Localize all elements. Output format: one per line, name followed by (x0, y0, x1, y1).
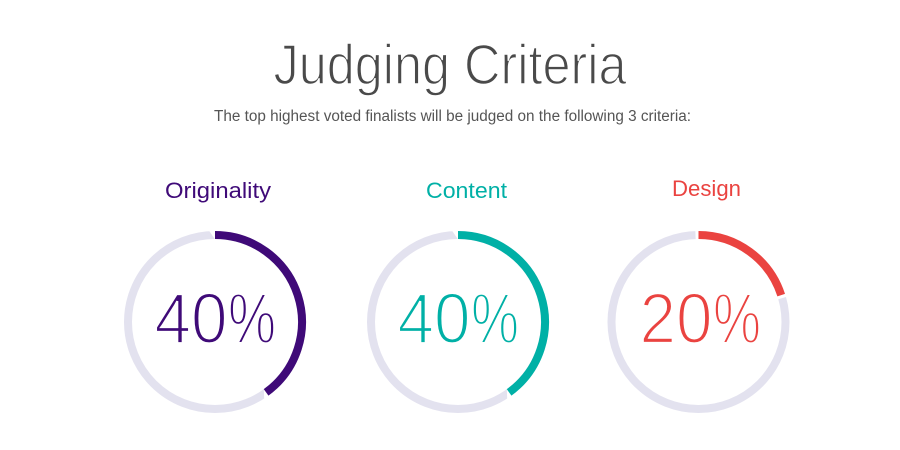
heading: content: Content (426, 178, 507, 203)
heading: originality: Originality (165, 178, 271, 203)
value: originality: 40 (154, 280, 228, 359)
ring gap: content (455, 220, 591, 394)
ring value arc: design 20% (698, 235, 781, 295)
panel: design (612, 176, 786, 409)
ring gap: design (696, 235, 782, 298)
heading: design: Design (672, 176, 741, 201)
value: content: 40 (398, 280, 470, 359)
ring track: originality (128, 235, 302, 409)
ring track: design (612, 235, 786, 409)
subtitle: The top highest voted finalists will be judged on the following 3 criteria: (214, 108, 691, 125)
value: originality: % (228, 280, 276, 359)
panel: originality (128, 178, 348, 409)
panel: content (371, 178, 591, 409)
value: design: % (713, 280, 761, 359)
value: design: 20 (640, 280, 712, 359)
ring value arc: originality 40% (215, 235, 302, 392)
ring gap: originality (212, 220, 348, 394)
title: Judging Criteria (274, 33, 627, 97)
ring value arc: content 40% (458, 235, 545, 392)
value: content: % (471, 280, 519, 359)
ring track: content (371, 235, 545, 409)
